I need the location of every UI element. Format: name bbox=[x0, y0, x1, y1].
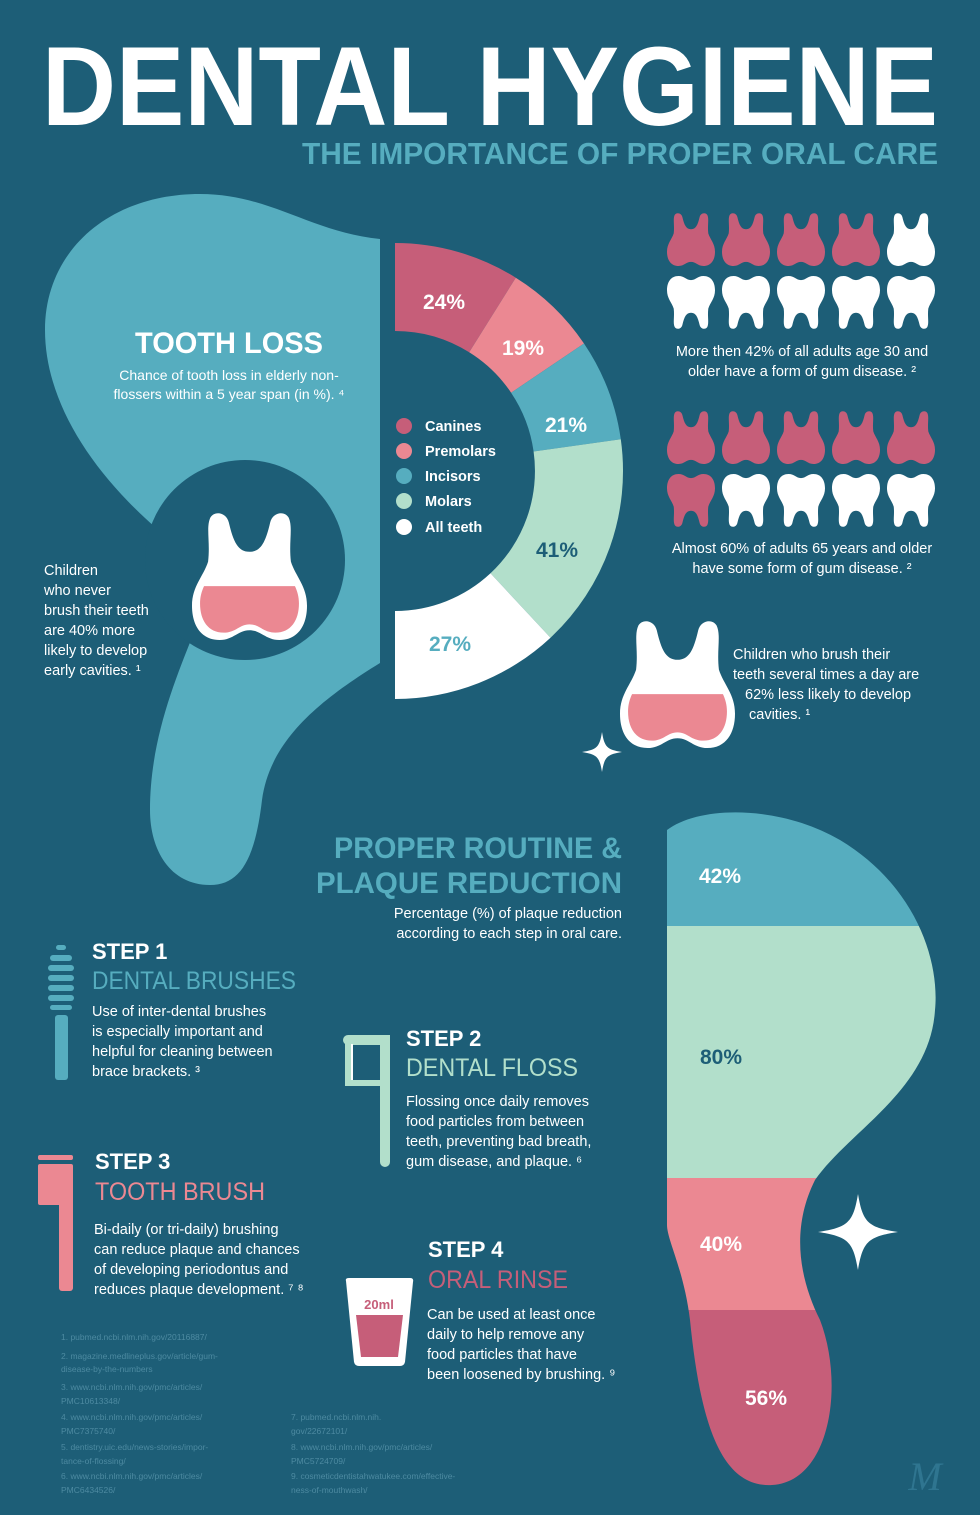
text: step 3: TOOTH BRUSH bbox=[95, 1178, 265, 1206]
text: tooth loss description: Chance of tooth loss in elderly non- bbox=[119, 367, 339, 383]
chart: plaque reduction shape: 42% bbox=[699, 865, 741, 888]
text: references column 2: 8. www.ncbi.nlm.nih.gov/pmc/articles/ bbox=[291, 1442, 433, 1452]
icon: tooth with cavity (right) bbox=[620, 621, 735, 748]
text: step 1: STEP 1 bbox=[92, 939, 167, 964]
text: references column 2: 9. cosmeticdentistahwatukee.com/effective- bbox=[291, 1471, 455, 1481]
text: references column 2: 7. pubmed.ncbi.nlm.nih. bbox=[291, 1412, 381, 1422]
subtitle: THE IMPORTANCE OF PROPER ORAL CARE bbox=[302, 136, 938, 171]
text: step 3 bbox=[94, 1149, 304, 1298]
text: references column 1: 3. www.ncbi.nlm.nih.gov/pmc/articles/ bbox=[61, 1382, 203, 1392]
text: step 4: daily to help remove any bbox=[427, 1327, 585, 1343]
text: children never brush: are 40% more bbox=[44, 623, 135, 639]
text: routine description: Percentage (%) of plaque reduction bbox=[394, 906, 622, 922]
text: step 2: DENTAL FLOSS bbox=[406, 1054, 578, 1082]
text: references column 1: 6. www.ncbi.nlm.nih.gov/pmc/articles/ bbox=[61, 1471, 203, 1481]
legend: Canines bbox=[425, 419, 481, 435]
text: references column 2: PMC5724709/ bbox=[291, 1456, 346, 1466]
text: children never brush: likely to develop bbox=[44, 643, 147, 659]
chart: teeth 42% bbox=[667, 213, 935, 329]
chart: tooth loss half donut: 41% bbox=[536, 539, 578, 562]
chart: plaque reduction shape: 80% bbox=[700, 1046, 742, 1069]
text: step 4 bbox=[427, 1237, 615, 1383]
text: references column 1: PMC6434526/ bbox=[61, 1485, 116, 1495]
text: children brush several times: Children who brush their bbox=[733, 647, 890, 663]
text: step 2: Flossing once daily removes bbox=[406, 1094, 589, 1110]
text: step 2 bbox=[406, 1026, 591, 1170]
chart: teeth 60% bbox=[667, 411, 935, 527]
logo: M bbox=[907, 1454, 944, 1499]
text: routine description: according to each step in oral care. bbox=[396, 926, 622, 942]
icon: rinse cup: 20ml bbox=[364, 1297, 394, 1312]
chart: tooth loss half donut: 27% bbox=[429, 633, 471, 656]
text: references column 2: gov/22672101/ bbox=[291, 1426, 348, 1436]
text: step 3: Bi-daily (or tri-daily) brushing bbox=[94, 1222, 279, 1238]
legend: Premolars bbox=[425, 444, 496, 460]
heading: tooth loss: TOOTH LOSS bbox=[135, 327, 323, 360]
chart: plaque reduction shape: 40% bbox=[700, 1233, 742, 1256]
text: references column 1: 1. pubmed.ncbi.nlm.nih.gov/20116887/ bbox=[61, 1332, 207, 1342]
text: step 1: DENTAL BRUSHES bbox=[92, 967, 296, 995]
icon: floss pick bbox=[348, 1040, 385, 1162]
text: children brush several times: teeth several times a day are bbox=[733, 667, 919, 683]
icon: small sparkle bbox=[582, 732, 622, 772]
text: references column 1: tance-of-flossing/ bbox=[61, 1456, 126, 1466]
text: step 1: Use of inter-dental brushes bbox=[92, 1004, 266, 1020]
text: step 2: gum disease, and plaque. ⁶ bbox=[406, 1154, 582, 1170]
chart: tooth loss half donut bbox=[395, 243, 623, 699]
text: references column 2: ness-of-mouthwash/ bbox=[291, 1485, 368, 1495]
chart: tooth loss half donut: 24% bbox=[423, 291, 465, 314]
text: step 3: reduces plaque development. ⁷ ⁸ bbox=[94, 1282, 304, 1298]
legend: Incisors bbox=[425, 469, 481, 485]
text: step 1: is especially important and bbox=[92, 1024, 263, 1040]
chart: tooth loss half donut: 21% bbox=[545, 414, 587, 437]
chart: tooth loss half donut: 19% bbox=[502, 337, 544, 360]
legend: All teeth bbox=[425, 520, 482, 536]
text: 42% adults: older have a form of gum disease. ² bbox=[688, 364, 916, 380]
text: 60% adults: Almost 60% of adults 65 years and older bbox=[672, 541, 932, 557]
text: references column 1: disease-by-the-numbers bbox=[61, 1364, 153, 1374]
text: references column 1: 4. www.ncbi.nlm.nih.gov/pmc/articles/ bbox=[61, 1412, 203, 1422]
text: step 1 bbox=[92, 939, 296, 1080]
text: children never brush: who never bbox=[43, 583, 111, 599]
text: step 4: food particles that have bbox=[427, 1347, 577, 1363]
text: step 2: teeth, preventing bad breath, bbox=[406, 1134, 591, 1150]
heading: proper routine: PROPER ROUTINE & bbox=[334, 832, 622, 865]
text: 60% adults: have some form of gum disease. ² bbox=[692, 561, 912, 577]
text: step 3: of developing periodontus and bbox=[94, 1262, 288, 1278]
text: 42% adults: More then 42% of all adults age 30 and bbox=[676, 344, 928, 360]
text: step 2: food particles from between bbox=[406, 1114, 584, 1130]
text: step 3: STEP 3 bbox=[95, 1149, 170, 1174]
icon: tooth with cavity (left) bbox=[192, 513, 307, 640]
text: children never brush: brush their teeth bbox=[44, 603, 149, 619]
text: step 1: brace brackets. ³ bbox=[92, 1064, 200, 1080]
text: tooth loss description: flossers within a 5 year span (in %). ⁴ bbox=[114, 386, 344, 402]
text: step 2: STEP 2 bbox=[406, 1026, 481, 1051]
text: step 4: Can be used at least once bbox=[427, 1307, 595, 1323]
text: step 1: helpful for cleaning between bbox=[92, 1044, 273, 1060]
icon: tooth brush bbox=[38, 1155, 73, 1291]
panel: tooth loss blob bbox=[45, 194, 380, 885]
legend: Molars bbox=[425, 494, 472, 510]
text: children never brush: early cavities. ¹ bbox=[44, 663, 141, 679]
legend bbox=[396, 418, 496, 536]
text: step 4: ORAL RINSE bbox=[428, 1266, 568, 1294]
heading: proper routine: PLAQUE REDUCTION bbox=[316, 867, 622, 900]
chart: plaque reduction shape bbox=[667, 812, 936, 1486]
text: references column 1: 5. dentistry.uic.edu/news-stories/impor- bbox=[61, 1442, 208, 1452]
icon: big sparkle bbox=[818, 1194, 898, 1270]
text: children brush several times: cavities. ¹ bbox=[749, 707, 810, 723]
chart: plaque reduction shape: 56% bbox=[745, 1387, 787, 1410]
text: step 4: been loosened by brushing. ⁹ bbox=[427, 1367, 615, 1383]
text: references column 1: PMC10613348/ bbox=[61, 1396, 121, 1406]
text: references column 1: 2. magazine.medlineplus.gov/article/gum- bbox=[61, 1351, 218, 1361]
text: references column 1: PMC7375740/ bbox=[61, 1426, 116, 1436]
icon: rinse cup bbox=[346, 1278, 413, 1366]
text: children brush several times: 62% less likely to develop bbox=[745, 687, 911, 703]
text: step 3: can reduce plaque and chances bbox=[94, 1242, 300, 1258]
text: children never brush: Children bbox=[44, 563, 98, 579]
text: step 4: STEP 4 bbox=[428, 1237, 504, 1262]
icon: interdental brush bbox=[48, 945, 74, 1080]
